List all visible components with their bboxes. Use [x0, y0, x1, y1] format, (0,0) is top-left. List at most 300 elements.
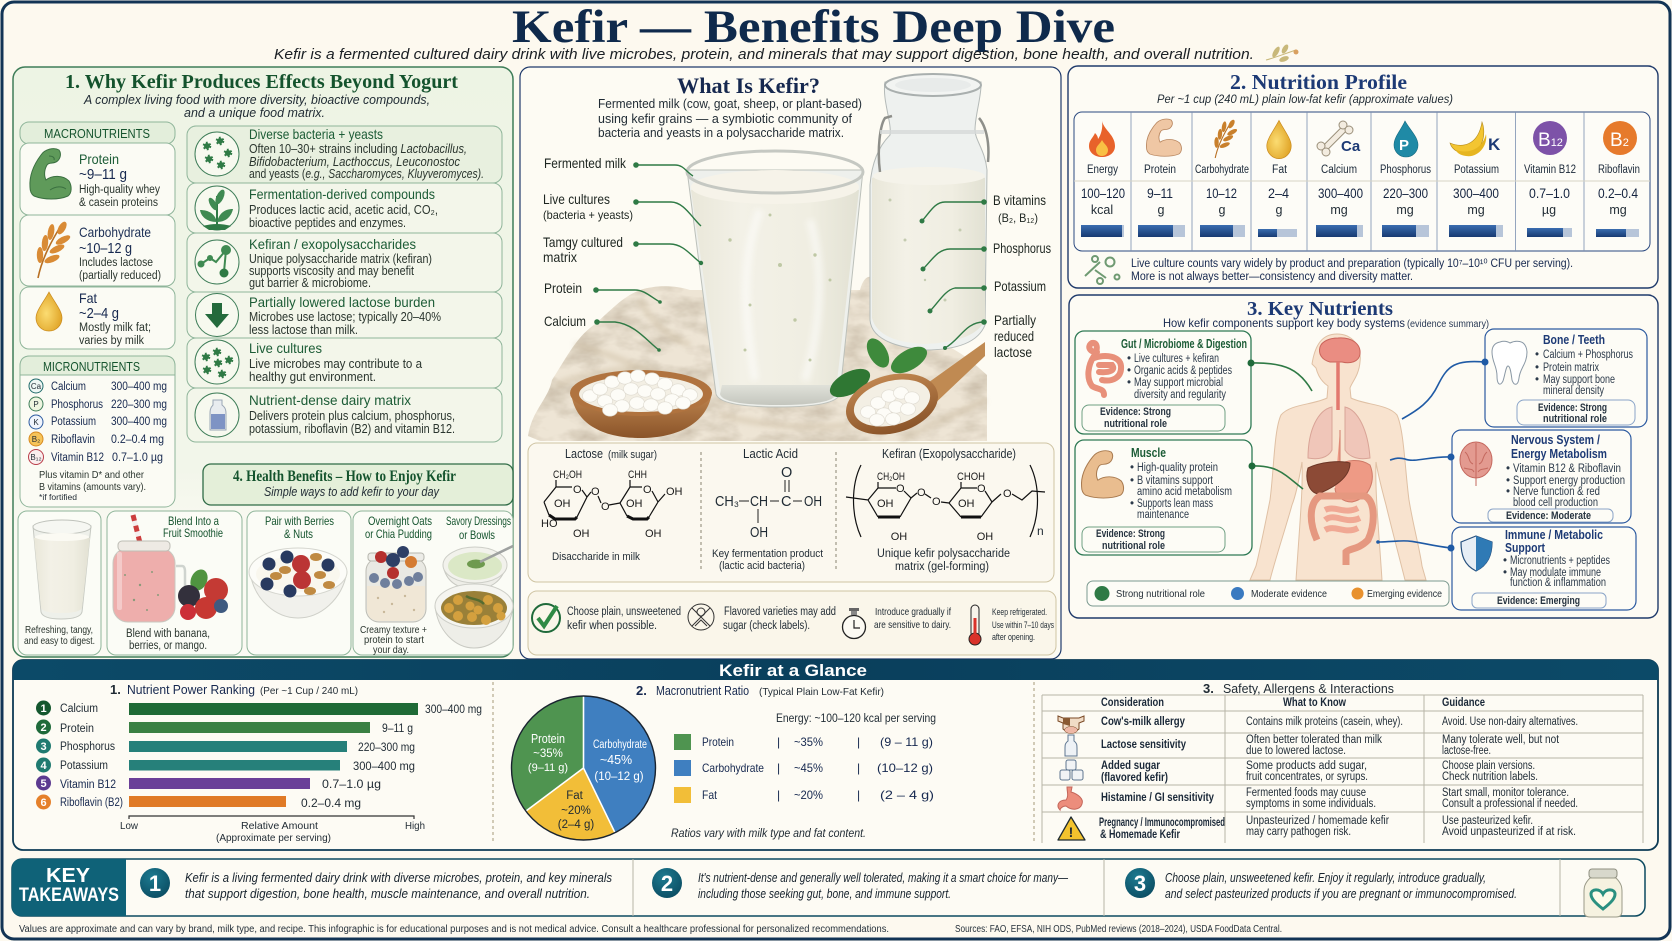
evidence: bone: nutritional role — [1543, 413, 1607, 425]
glance title: Kefir at a Glance — [719, 662, 867, 680]
nutrition values: 0.7–1.0 — [1529, 186, 1570, 201]
safety row: added sugar: Choose plain versions. — [1442, 760, 1535, 772]
card: fruit smoothie — [107, 511, 242, 655]
section 4 heading: health benefits: Simple ways to add kefir to your day — [264, 485, 440, 499]
structure: lactose: O — [601, 501, 610, 513]
callouts: left labels: Calcium — [544, 313, 586, 329]
macronutrient: protein: ~9–11 g — [79, 167, 127, 183]
safety row: pregnancy: Pregnancy / Immunocompromised — [1099, 817, 1225, 829]
structure: lactose: O — [573, 484, 582, 496]
what is kefir description: Fermented milk (cow, goat, sheep, or plant-based) — [598, 96, 862, 111]
box: immune support — [1452, 527, 1636, 610]
benefit 4: lowered lactose: less lactose than milk. — [249, 323, 358, 337]
structure: lactic acid: (lactic acid bacteria) — [719, 560, 805, 572]
rank labels: Riboflavin (B2) — [60, 797, 123, 809]
benefit 1: diverse bacteria: and yeasts (e.g., Saccharomyces, Kluyveromyces). — [249, 167, 484, 181]
nutrition bars — [1081, 225, 1639, 237]
ratio legend: (2 – 4 g) — [880, 788, 934, 802]
structure: kefiran — [846, 446, 1045, 573]
structure: lactose: OH — [554, 498, 571, 510]
rank badges: 1 — [40, 703, 47, 715]
callouts: right labels — [920, 192, 1051, 360]
benefit 6: dairy matrix — [187, 388, 502, 442]
benefit 2: fermentation compounds: Fermentation-derived compounds — [249, 186, 435, 202]
rank values: 300–400 mg — [353, 761, 415, 773]
benefit 1: diverse bacteria — [187, 126, 502, 183]
box: nervous system: Vitamin B12 & Riboflavin — [1513, 463, 1621, 475]
safety row: added sugar: Some products add sugar, — [1246, 760, 1367, 772]
rank badges: 5 — [40, 778, 47, 790]
rank values: 220–300 mg — [358, 742, 415, 754]
nutrition labels: Calcium — [1321, 164, 1357, 176]
footer disclaimer: Values are approximate and can vary by brand, milk type, and recipe. This infographic is for educational purposes and is not medical advice. Consult a healthcare professional for personalized recommendations. — [19, 924, 889, 935]
tip: keep refrigerated: Keep refrigerated. — [992, 607, 1047, 618]
nutrition units: mg — [1396, 203, 1414, 217]
card: oats and savory: your day. — [373, 644, 409, 656]
card: refreshing glass: and easy to digest. — [24, 635, 95, 647]
micronutrient rows: B₂ — [32, 435, 40, 444]
tip: introduce gradually — [874, 606, 951, 631]
callouts: right labels: reduced — [994, 328, 1034, 344]
oats jar — [366, 546, 426, 622]
benefit 1: diverse bacteria: Diverse bacteria + yeasts — [249, 126, 383, 142]
safety row: lactose sensitivity: Lactose sensitivity — [1101, 739, 1186, 751]
rank values: 9–11 g — [382, 723, 413, 735]
nutrition units: mg — [1467, 203, 1485, 217]
panel: key takeaways — [12, 859, 1645, 917]
micronutrient rows: B₁₂ — [30, 453, 42, 462]
structure: kefiran: Unique kefir polysaccharide — [877, 548, 1010, 560]
structure: lactic acid: OH — [750, 525, 768, 541]
card: berries and nuts — [247, 511, 351, 655]
card: refreshing glass: Refreshing, tangy, — [25, 624, 93, 636]
nutrition labels: Carbohydrate — [1195, 164, 1249, 176]
nutrition labels: Riboflavin — [1598, 164, 1640, 176]
structure: kefiran: OH — [877, 498, 894, 510]
micronutrient note: B vitamins (amounts vary). — [39, 481, 146, 493]
tip: choose plain — [567, 606, 681, 632]
benefit 5: live cultures: Live cultures — [249, 340, 322, 356]
icon: jar with heart — [1584, 869, 1622, 917]
rank badges — [36, 700, 51, 810]
safety row: histamine — [1058, 787, 1578, 810]
safety row: added sugar: Added sugar — [1101, 760, 1160, 772]
safety row: lactose sensitivity: Many tolerate well, but not — [1442, 734, 1560, 746]
micronutrient rows: Potassium — [51, 416, 96, 428]
callouts: right labels: B vitamins — [993, 192, 1046, 208]
structure: lactose: O — [591, 486, 600, 498]
rank labels: Vitamin B12 — [60, 779, 116, 791]
nutrition labels: Fat — [1272, 164, 1288, 176]
box: immune support: May modulate immune — [1510, 567, 1601, 579]
structure: lactic acid: Key fermentation product — [712, 548, 823, 560]
benefit 3: kefiran: gut barrier & microbiome. — [249, 276, 371, 290]
icon: no added sugar — [688, 604, 714, 630]
organ: lungs — [1308, 407, 1370, 459]
takeaway 1: 1 — [149, 871, 161, 896]
structure: lactose: Disaccharide in milk — [552, 551, 640, 563]
pie chart: (2–4 g) — [558, 819, 594, 831]
rank labels: Phosphorus — [60, 741, 115, 753]
nutrition labels: Phosphorus — [1380, 164, 1431, 176]
box: immune support: function & inflammation — [1510, 577, 1606, 589]
safety row: cow's milk allergy — [1058, 716, 1578, 734]
tip: flavored varieties — [723, 606, 836, 632]
card: fruit smoothie: Blend Into a — [168, 514, 219, 528]
ratio legend: | — [857, 761, 860, 775]
micronutrient rows: 0.7–1.0 µg — [112, 452, 163, 464]
card: oats and savory: protein to start — [364, 634, 424, 646]
safety row: histamine: Fermented foods may cuuse — [1246, 787, 1366, 799]
benefit 3: kefiran: Unique polysaccharide matrix (kefiran) — [249, 252, 432, 266]
safety row: histamine: Start small, monitor tolerance. — [1442, 787, 1569, 799]
evidence: muscle: nutritional role — [1102, 540, 1165, 552]
card: berries and nuts: & Nuts — [284, 527, 313, 541]
evidence legend — [1087, 581, 1449, 606]
takeaway 1: Kefir is a living fermented dairy drink with diverse microbes, protein, and key minerals — [185, 870, 612, 885]
ratio heading: 2. — [636, 683, 647, 698]
box: muscle: maintenance — [1137, 509, 1189, 521]
nutrition values: 300–400 — [1453, 186, 1499, 201]
icon: thermometer — [969, 605, 981, 645]
macronutrient: fat: varies by milk — [79, 335, 144, 347]
structure: lactic acid: Lactic Acid — [743, 446, 798, 461]
safety row: added sugar — [1060, 760, 1538, 784]
nutrition labels: Protein — [1144, 164, 1176, 176]
evidence: immune — [1472, 593, 1606, 608]
ratio legend: ~20% — [794, 788, 823, 802]
card: fruit smoothie: berries, or mango. — [129, 640, 207, 652]
rank badges: 6 — [40, 797, 47, 809]
macronutrient: fat: Mostly milk fat; — [79, 322, 151, 334]
rank values: 0.7–1.0 µg — [322, 779, 381, 791]
structure: lactose — [541, 446, 683, 563]
nutrition values — [1081, 186, 1638, 201]
micronutrient rows: Calcium — [51, 381, 86, 393]
micronutrient rows: P — [33, 400, 39, 409]
structure: lactic acid: OH — [804, 494, 822, 510]
box: bone and teeth: Calcium + Phosphorus — [1543, 349, 1633, 361]
macronutrient: fat: ~2–4 g — [79, 306, 119, 322]
rank axis: (Approximate per serving) — [216, 832, 331, 844]
safety row: histamine: symptoms in some individuals. — [1246, 798, 1376, 810]
box: immune support: Immune / Metabolic — [1505, 528, 1603, 542]
ranking heading — [110, 682, 358, 697]
rank values — [301, 704, 482, 810]
safety header row — [1101, 697, 1485, 709]
panel: choosing and storage tips — [528, 591, 1056, 655]
what is kefir description — [598, 96, 862, 140]
structure: lactic acid: O — [781, 465, 792, 481]
macronutrient: carbohydrate — [20, 215, 175, 286]
panel 1 subheading: A complex living food with more diversity, bioactive compounds, — [83, 93, 430, 107]
card: fruit smoothie: Fruit Smoothie — [163, 526, 223, 540]
callouts: left labels: Live cultures — [543, 191, 610, 207]
structure: lactic acid: CH — [750, 494, 768, 510]
rank labels: Protein — [60, 723, 94, 735]
rank badges: 3 — [40, 741, 47, 753]
box: muscle — [1075, 440, 1252, 555]
safety row: pregnancy: ! — [1069, 824, 1073, 840]
benefit 3: kefiran: Kefiran / exopolysaccharides — [249, 236, 416, 252]
footer sources: Sources: FAO, EFSA, NIH ODS, PubMed reviews (2018–2024), USDA FoodData Central. — [955, 924, 1282, 935]
nutrition table — [1074, 112, 1650, 251]
box: immune support: Support — [1505, 541, 1546, 555]
nutrition labels: Energy — [1087, 164, 1118, 176]
ratio heading: (Typical Plain Low-Fat Kefir) — [759, 686, 884, 698]
chickpea bowl — [435, 584, 513, 648]
panel: what is kefir — [520, 67, 1061, 659]
takeaway 2: 2 — [661, 871, 673, 896]
rank values: 0.2–0.4 mg — [301, 798, 361, 810]
panel: kefir at a glance — [13, 660, 1658, 850]
benefit 3: kefiran — [187, 233, 502, 292]
benefit 6: dairy matrix: potassium, riboflavin (B2) and vitamin B12. — [249, 422, 455, 436]
box: bone and teeth: • — [1535, 374, 1539, 386]
rank labels — [60, 703, 123, 809]
safety heading: 3. — [1203, 681, 1214, 696]
evidence legend: Moderate evidence — [1251, 588, 1327, 600]
takeaways label — [12, 859, 126, 916]
box: muscle: • — [1130, 475, 1134, 487]
callouts: left labels: (bacteria + yeasts) — [543, 208, 633, 222]
safety row: lactose sensitivity: lactose-free. — [1442, 745, 1491, 757]
macronutrient: protein: Protein — [79, 151, 119, 167]
safety row: lactose sensitivity — [1065, 734, 1560, 757]
micronutrient note — [39, 469, 146, 502]
macronutrients header: MACRONUTRIENTS — [44, 126, 150, 141]
nutrition icons: K — [1488, 135, 1501, 154]
chart: nutrient power ranking — [36, 682, 482, 844]
what is kefir description: bacteria and yeasts in a polysaccharide matrix. — [598, 125, 844, 140]
benefit 1: diverse bacteria: Often 10–30+ strains including Lactobacillus, — [249, 142, 467, 156]
structure: lactic acid: C — [781, 494, 791, 510]
pie chart: Protein — [531, 732, 565, 746]
panel 3 heading: 3. Key Nutrients — [1247, 298, 1393, 320]
organ: stomach and esophagus — [1335, 430, 1372, 502]
rank badges: 2 — [40, 722, 47, 734]
box: nervous system: Energy Metabolism — [1511, 447, 1607, 461]
safety row: lactose sensitivity: Often better tolerated than milk — [1246, 734, 1382, 746]
nutrition values: 100–120 — [1081, 186, 1125, 201]
takeaway 3 — [1125, 868, 1517, 901]
structure: kefiran: O — [896, 483, 905, 495]
benefit 2: fermentation compounds: bioactive peptides and enzymes. — [249, 216, 406, 230]
evidence legend: Emerging evidence — [1367, 588, 1442, 600]
benefit 4: lowered lactose — [187, 292, 502, 338]
ratio legend: | — [857, 735, 860, 749]
safety header row: Guidance — [1442, 697, 1485, 709]
evidence: gut — [1082, 405, 1225, 431]
photo: kefir glass, jar, grains — [528, 74, 988, 444]
safety row: pregnancy: may carry pathogen risk. — [1246, 826, 1351, 838]
pie chart: ~45% — [600, 753, 632, 767]
evidence: nervous: Evidence: Moderate — [1506, 510, 1591, 522]
structure: lactose: O — [643, 484, 652, 496]
nutrition icons: P — [1399, 137, 1409, 154]
box: nervous system: Nerve function & red — [1513, 486, 1600, 498]
structure: lactose: OH — [645, 528, 662, 540]
what is kefir description: using kefir grains — a symbiotic community of — [598, 111, 852, 126]
organ: intestines — [1311, 496, 1373, 565]
box: muscle: High-quality protein — [1137, 462, 1218, 474]
tip: introduce gradually: Introduce gradually if — [875, 606, 951, 618]
takeaway 2: It's nutrient-dense and generally well tolerated, making it a smart choice for many— — [698, 870, 1069, 885]
nutrition values: 220–300 — [1383, 186, 1428, 201]
macronutrient: carbohydrate: ~10–12 g — [79, 241, 132, 257]
box: muscle: amino acid metabolism — [1137, 486, 1232, 498]
structure: kefiran: O — [932, 496, 941, 508]
macronutrient: carbohydrate: (partially reduced) — [79, 270, 161, 282]
tip: introduce gradually: are sensitive to dairy. — [874, 619, 951, 631]
connector: bone — [1402, 358, 1488, 419]
box: nervous system — [1452, 430, 1631, 523]
box: bone and teeth: May support bone — [1543, 374, 1615, 386]
structure: lactic acid — [712, 446, 823, 572]
macronutrient: protein — [20, 143, 175, 215]
nutrition icons: B12 — [1538, 130, 1563, 151]
glass of kefir — [687, 151, 863, 407]
benefit 6: dairy matrix: Nutrient-dense dairy matrix — [249, 392, 411, 408]
box: gut microbiome: Organic acids & peptides — [1134, 365, 1232, 377]
icon: brain — [1460, 442, 1492, 486]
takeaway 2: including those seeking gut, bone, and immune support. — [698, 886, 951, 901]
ratio legend: | — [857, 788, 860, 802]
panel 3: key nutrients — [1069, 295, 1658, 618]
takeaway 3: and select pasteurized products if you are pregnant or immunocompromised. — [1165, 886, 1517, 901]
structure: lactose: CH₂OH — [553, 469, 582, 481]
structure: kefiran: CHOH — [957, 471, 985, 483]
ratio legend: | — [777, 788, 780, 802]
safety row: cow's milk allergy: Cow's-milk allergy — [1101, 716, 1185, 728]
box: gut microbiome: • — [1127, 365, 1131, 377]
safety row: pregnancy: Use pasteurized kefir. — [1442, 815, 1533, 827]
rank values: 300–400 mg — [425, 704, 482, 716]
micronutrient rows: Riboflavin — [51, 434, 95, 446]
box: bone and teeth: Protein matrix — [1543, 362, 1599, 374]
safety row: pregnancy: Avoid unpasteurized if at risk. — [1442, 826, 1576, 838]
evidence: muscle: Evidence: Strong — [1096, 528, 1165, 540]
panel 2 heading: 2. Nutrition Profile — [1230, 70, 1407, 94]
callouts: right labels: (B₂, B₁₂) — [998, 211, 1038, 225]
section 4 heading: health benefits: 4. Health Benefits – How to Enjoy Kefir — [233, 468, 456, 485]
box: gut microbiome: Gut / Microbiome & Digestion — [1121, 337, 1247, 351]
nutrition units: mg — [1330, 203, 1348, 217]
benefit 4: lowered lactose: Microbes use lactose; typically 20–40% — [249, 310, 441, 324]
panel 1: why kefir produces effects — [13, 67, 513, 657]
nutrition units — [1091, 203, 1627, 217]
macronutrients header — [20, 122, 175, 144]
micronutrient rows: 220–300 mg — [111, 399, 167, 411]
takeaway 1 — [140, 868, 612, 901]
ranking heading: Nutrient Power Ranking — [127, 682, 255, 697]
ranking heading: (Per ~1 Cup / 240 mL) — [260, 685, 358, 697]
nutrition units: g — [1219, 203, 1226, 217]
linen cloth — [528, 277, 987, 441]
benefit 2: fermentation compounds — [187, 183, 502, 233]
mint leaves — [825, 335, 931, 403]
safety row: lactose sensitivity: due to lowered lactose. — [1246, 745, 1346, 757]
safety header row: What to Know — [1283, 697, 1346, 709]
rank axis: Low — [120, 820, 138, 832]
nutrition labels: Potassium — [1454, 164, 1499, 176]
macronutrient: protein: High-quality whey — [79, 184, 160, 196]
micronutrient rows: Vitamin B12 — [51, 452, 104, 464]
micronutrient rows: 0.2–0.4 mg — [111, 434, 164, 446]
rank axis — [120, 816, 425, 844]
structure: kefiran: OH — [977, 531, 993, 543]
tip: flavored varieties: sugar (check labels). — [723, 620, 810, 632]
box: nervous system: Nervous System / — [1511, 433, 1600, 447]
evidence: immune: Evidence: Emerging — [1497, 595, 1580, 607]
structure: kefiran: OH — [891, 531, 907, 543]
panel 1 subheading: and a unique food matrix. — [184, 106, 325, 120]
benefit 3: kefiran: supports viscosity and may benefit — [249, 264, 414, 278]
macronutrient: fat: Fat — [79, 290, 97, 306]
live culture note: More is not always better—consistency and diversity matter. — [1131, 271, 1413, 283]
ratio footnote: Ratios vary with milk type and fat content. — [671, 828, 866, 840]
box: gut microbiome: Live cultures + kefiran — [1134, 353, 1219, 365]
box: bone and teeth — [1485, 329, 1647, 427]
box: bone and teeth: • — [1535, 349, 1539, 361]
structure: lactose: HO — [541, 518, 558, 530]
box: bone and teeth: Bone / Teeth — [1543, 333, 1605, 347]
nutrition units: g — [1158, 203, 1165, 217]
callouts: left labels — [543, 155, 703, 352]
safety row: histamine: Consult a professional if needed. — [1442, 798, 1578, 810]
live culture note — [1131, 258, 1573, 283]
structure: kefiran: O — [917, 487, 926, 499]
wooden bowl of grains — [570, 370, 712, 438]
what is kefir heading: What Is Kefir? — [677, 73, 820, 98]
safety row: cow's milk allergy: Avoid. Use non-dairy alternatives. — [1442, 716, 1578, 728]
evidence: gut: nutritional role — [1104, 418, 1167, 430]
ratio legend: Protein — [702, 735, 734, 749]
rank badges: 4 — [40, 760, 47, 772]
section 4 heading: health benefits — [203, 464, 513, 505]
micronutrients box — [20, 356, 175, 507]
card: oats and savory: Savory Dressings — [446, 514, 511, 528]
panel 2: nutrition profile — [1068, 66, 1658, 288]
callouts: left labels: Protein — [544, 280, 582, 296]
wooden spoon with grains — [839, 342, 985, 444]
nutrition values: 2–4 — [1268, 186, 1289, 201]
safety row: added sugar: Check nutrition labels. — [1442, 771, 1538, 783]
callouts: left labels: matrix — [543, 249, 577, 265]
icon: intestine — [1088, 343, 1121, 395]
nutrition values: 9–11 — [1147, 186, 1173, 201]
ratio legend: ~45% — [794, 761, 823, 775]
benefit 5: live cultures: healthy gut environment. — [249, 370, 376, 384]
takeaway 2 — [652, 868, 1069, 901]
takeaway 3: Choose plain, unsweetened kefir. Enjoy it regularly, introduce gradually, — [1165, 870, 1486, 885]
box: gut microbiome — [1075, 331, 1251, 434]
structure: lactose: CHH — [628, 469, 647, 481]
box: muscle: • — [1130, 462, 1134, 474]
icon: live cultures note — [1085, 256, 1120, 284]
ratio legend: | — [777, 735, 780, 749]
nutrition units: mg — [1609, 203, 1627, 217]
safety row: cow's milk allergy: Contains milk proteins (casein, whey). — [1246, 716, 1403, 728]
evidence: muscle — [1082, 527, 1225, 552]
benefit 1: diverse bacteria: Bifidobacterium, Lacthoccus, Leuconostoc — [249, 155, 461, 169]
evidence: gut: Evidence: Strong — [1100, 406, 1171, 418]
evidence: bone — [1517, 400, 1635, 425]
tip: keep refrigerated: after opening. — [992, 632, 1035, 643]
ratio legend: | — [777, 761, 780, 775]
box: nervous system: • — [1506, 475, 1510, 487]
callouts: right labels: Phosphorus — [993, 240, 1051, 256]
